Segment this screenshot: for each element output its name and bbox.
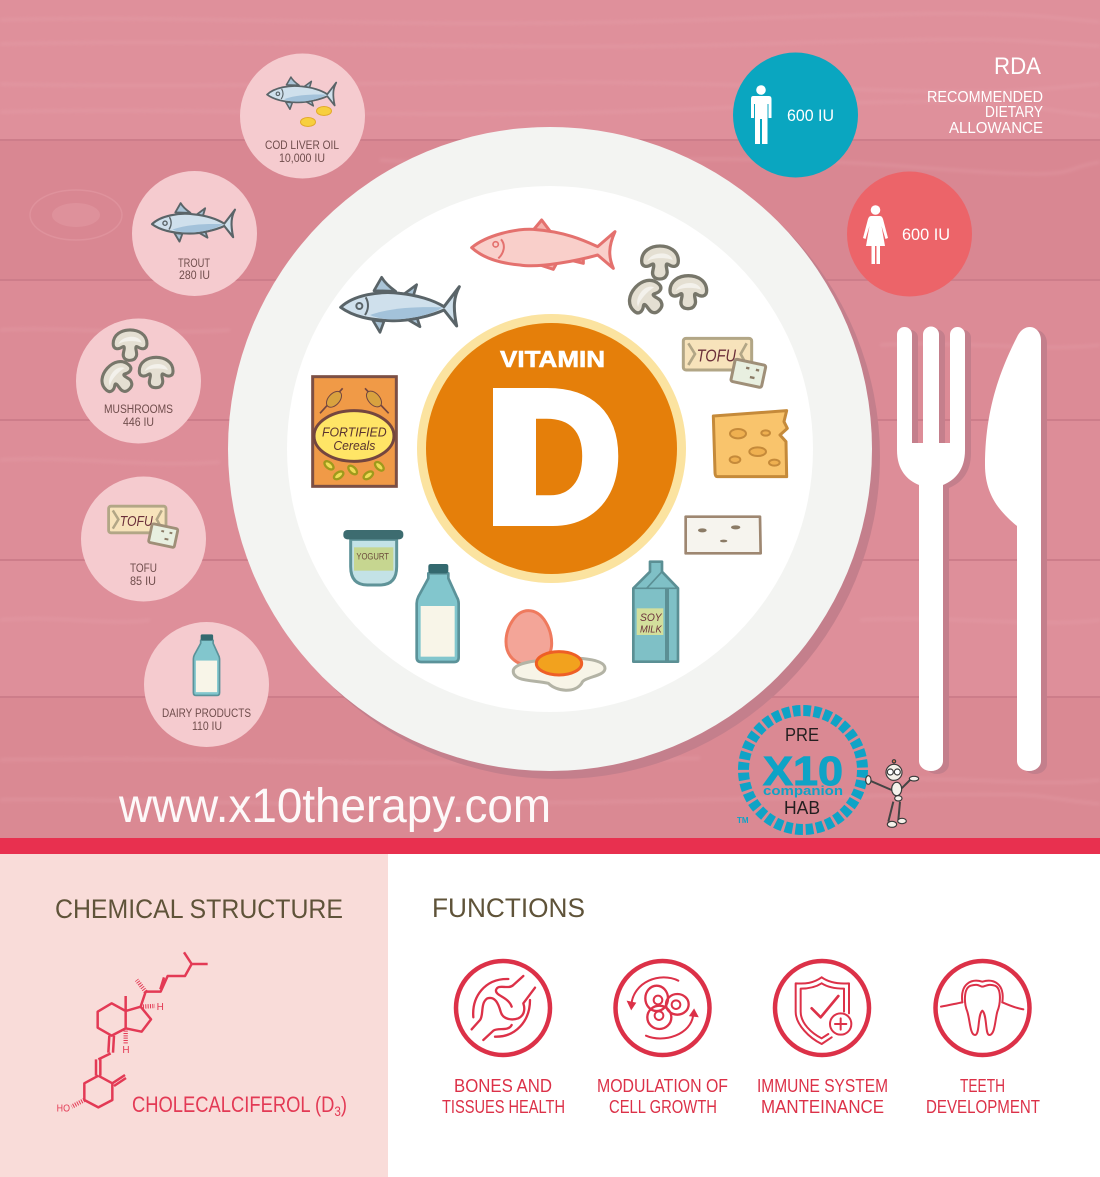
chart: cholecalciferol molecule: H (122, 1045, 130, 1056)
RDA heading: RECOMMENDED (927, 89, 1043, 106)
function: immune system maintenance: MANTEINANCE (761, 1097, 884, 1117)
icon: soy milk carton: SOY (640, 612, 662, 624)
logo: X10 companion: TM (737, 816, 749, 825)
food circle: trout: 280 IU (179, 270, 210, 282)
logo: X10 companion: X10 (763, 748, 843, 794)
food circle: tofu: TOFU (130, 563, 157, 575)
function: bones and tissues health: BONES AND (454, 1076, 552, 1096)
icon: white tofu block (686, 517, 761, 553)
food circle: dairy products: DAIRY PRODUCTS (162, 708, 251, 720)
function: teeth development: DEVELOPMENT (926, 1097, 1040, 1117)
panel: chemical structure (0, 854, 388, 1177)
food circle: tofu: 85 IU (130, 576, 156, 588)
food circle: trout (132, 171, 257, 296)
logo: X10 companion: companion (763, 783, 843, 798)
food circle: tofu (81, 476, 206, 602)
female RDA circle (847, 172, 972, 296)
food circle: cod liver oil: COD LIVER OIL (265, 140, 340, 152)
food circle: cod liver oil (240, 54, 365, 178)
RDA heading: RDA (994, 53, 1041, 80)
RDA heading: DIETARY (985, 104, 1043, 121)
chart: cholecalciferol molecule (57, 952, 208, 1115)
panel: food sources (76, 54, 365, 747)
icon: soy milk carton (633, 562, 678, 662)
function: bones and tissues health (442, 961, 565, 1117)
vitamin D badge (417, 314, 686, 583)
heading: chemical structure: CHEMICAL STRUCTURE (55, 894, 343, 924)
wooden table background (0, 0, 1100, 838)
icon: blue fish (341, 277, 459, 332)
icon: tofu package (683, 338, 766, 388)
icon: salmon (472, 220, 615, 269)
molecule name: CHOLECALCIFEROL (D (132, 1092, 374, 1117)
male RDA circle: 600 IU (787, 106, 834, 125)
function: modulation of cell growth: MODULATION OF (597, 1076, 728, 1096)
function: teeth development (926, 961, 1040, 1117)
chart: cholecalciferol molecule: HO (57, 1104, 70, 1115)
panel: functions (388, 854, 1100, 1177)
molecule name: 3 (334, 1103, 341, 1119)
logo: X10 companion (737, 710, 862, 830)
food circle: cod liver oil: 10,000 IU (279, 153, 325, 165)
icon: milk bottle (417, 564, 459, 662)
letter D: D (490, 354, 621, 561)
function: modulation of cell growth: CELL GROWTH (609, 1097, 717, 1117)
food circle: mushrooms: MUSHROOMS (104, 404, 173, 416)
function: teeth development: TEETH (960, 1076, 1005, 1096)
plate food icons (313, 220, 787, 690)
icon: fortified cereal box: FORTIFIED (322, 424, 387, 439)
icon: mushrooms (623, 246, 707, 323)
icon: fork (897, 326, 971, 774)
vitamin label: VITAMIN (500, 346, 605, 372)
food circle: dairy products: 110 IU (192, 721, 222, 733)
icon: yogurt: YOGURT (356, 551, 389, 561)
food circle: mushrooms (76, 318, 201, 444)
food circle: tofu: TOFU (120, 514, 153, 530)
icon: cheese (713, 411, 787, 477)
website address: www.x10therapy.com (118, 780, 551, 833)
icon: fortified cereal box: Cereals (333, 438, 376, 453)
icon: robot mascot (866, 760, 919, 827)
function: immune system maintenance: IMMUNE SYSTEM (757, 1076, 888, 1096)
logo: X10 companion: HAB (784, 798, 820, 818)
food circle: trout: TROUT (178, 258, 210, 270)
plate (228, 127, 880, 779)
function: bones and tissues health: TISSUES HEALTH (442, 1097, 565, 1117)
chart: cholecalciferol molecule: H (157, 1002, 164, 1013)
logo: X10 companion: PRE (785, 725, 819, 745)
icon: soy milk carton: MILK (640, 624, 662, 635)
food circle: dairy products (144, 622, 269, 747)
female RDA circle: 600 IU (902, 225, 950, 244)
red divider band (0, 838, 1100, 854)
icon: egg and fried egg (506, 611, 605, 690)
function: modulation of cell growth (597, 961, 728, 1117)
food circle: mushrooms: 446 IU (123, 417, 154, 429)
icon: tofu package: TOFU (697, 346, 736, 366)
panel: recommended dietary allowance (733, 52, 1043, 296)
molecule name: ) (341, 1092, 347, 1117)
male RDA circle (733, 52, 858, 178)
icon: yogurt (343, 530, 403, 585)
icon: knife (985, 327, 1047, 774)
RDA heading: ALLOWANCE (949, 120, 1043, 137)
icon: fortified cereal box (313, 377, 396, 486)
function: immune system maintenance (757, 961, 888, 1117)
heading: functions: FUNCTIONS (432, 893, 585, 923)
RDA heading (927, 53, 1043, 137)
